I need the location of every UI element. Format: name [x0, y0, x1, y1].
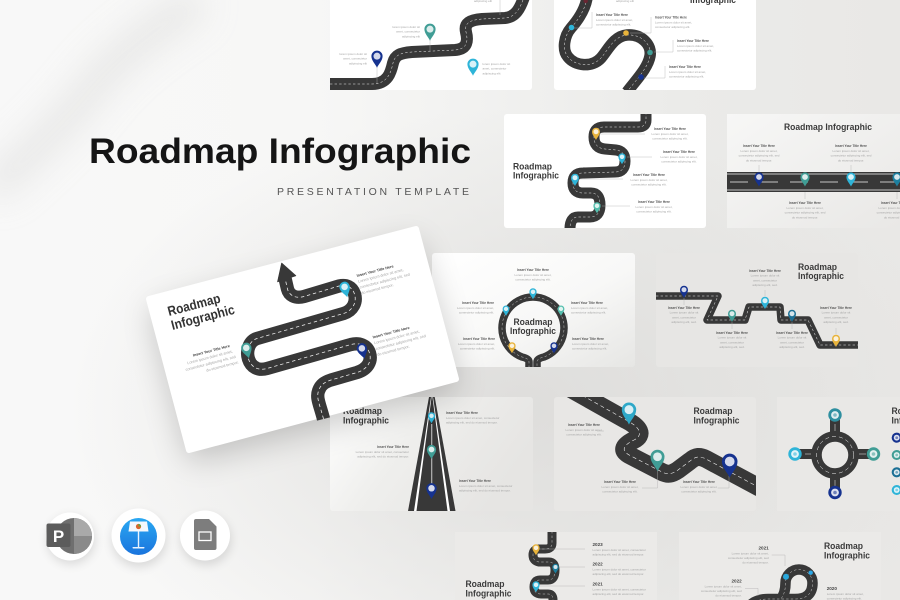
heading: Roadmap [166, 291, 222, 319]
pin: cyan [532, 581, 540, 592]
heading: Roadmap [514, 317, 553, 328]
text: label 1: Lorem ipsum dolor sit amet, [596, 18, 633, 22]
text: 2021: do eiusmod tempor. [742, 561, 769, 565]
panel: straight road slide [727, 114, 900, 228]
text: label 4: Insert Your Title Here [638, 200, 670, 204]
pin: yellow [832, 335, 840, 347]
text: top label: Lorem ipsum dolor sit amet, consectetur [446, 416, 499, 420]
text: label 2: Lorem ipsum dolor sit [718, 336, 746, 340]
text: 2020: 2020 [827, 586, 837, 591]
pin: teal [427, 445, 436, 459]
heading: Infographic [798, 271, 844, 282]
text: label 2: Lorem ipsum dolor sit amet, [660, 155, 698, 159]
road [330, 0, 525, 84]
panel: timeline road slide right [701, 541, 870, 600]
pin: navy [754, 172, 764, 187]
text: top label: Lorem ipsum dolor sit amet, [514, 273, 552, 277]
text: middle label: Lorem ipsum dolor sit amet, [601, 485, 639, 489]
main card shadow [150, 240, 460, 462]
text: middle label: consectetur adipiscing elit. [602, 490, 638, 494]
text: top label: Insert Your Title Here [446, 411, 478, 415]
road [502, 297, 564, 368]
text: middle label: Insert Your Title Here [377, 445, 409, 449]
icon: powerpoint: P [53, 527, 64, 546]
heading: Roadmap [466, 579, 505, 590]
text: right upper label: do eiusmod tempor. [361, 283, 394, 295]
heading: Infographic [343, 416, 389, 426]
pin: cyan [467, 59, 479, 76]
text: label 5: Insert Your Title Here [820, 306, 852, 310]
text: cyan label: adipiscing elit [482, 71, 501, 75]
text: right lower label: Lorem ipsum dolor sit amet, [374, 330, 420, 345]
panel: stepped road slide [656, 262, 858, 349]
text: 2022: consectetur adipiscing elit, sed [701, 589, 742, 593]
pin: navy [426, 483, 437, 499]
text: label 3: Insert Your Title Here [749, 269, 781, 273]
pin: navy [680, 286, 688, 298]
heading: Infographic [513, 170, 559, 182]
panel: top left road slide [330, 0, 532, 90]
text: left label: Lorem ipsum dolor sit amet, [565, 428, 603, 432]
panel: circular road slide [432, 253, 635, 367]
pin: dark teal [892, 172, 900, 187]
text: label 3: consectetur adipiscing elit, sed [785, 211, 826, 215]
text: right lower label [372, 322, 428, 357]
text: left lower label: Insert Your Title Here [463, 337, 495, 341]
pin: yellow [623, 30, 629, 36]
text: left lower label: Lorem ipsum dolor sit amet, [458, 342, 495, 346]
panel: top middle road slide [554, 0, 756, 90]
pin: cyan left [503, 305, 509, 316]
heading: Roadmap [798, 262, 837, 273]
heading [343, 406, 389, 426]
text: left label: consectetur adipiscing elit, sed [185, 355, 236, 372]
pin: cyan note [622, 402, 636, 425]
text: label 4: consectetur adipiscing elit. [669, 75, 704, 79]
pin: cyan [569, 25, 574, 30]
pin: left [788, 447, 802, 461]
text: label 1: consectetur adipiscing elit. [652, 137, 688, 141]
heading: Roadmap [824, 541, 863, 552]
text: 2022: do eiusmod tempor. [715, 594, 742, 598]
text: cyan label: lorem ipsum dolor sit [482, 62, 510, 66]
text: bottom label: Insert Your Title Here [459, 479, 491, 483]
text: label 2: Insert Your Title Here [835, 144, 867, 148]
text: label 2: consectetur adipiscing elit. [655, 25, 690, 29]
text: label 3: amet, consectetur [753, 278, 777, 282]
text: label 2: consectetur adipiscing elit. [661, 160, 697, 164]
pin: teal [240, 342, 254, 360]
text: 2021: 2021 [758, 546, 769, 550]
pin: teal [728, 310, 736, 322]
text: label 5: amet, consectetur [824, 315, 848, 319]
pin: yellow [592, 128, 600, 140]
text: label 3: consectetur adipiscing elit. [677, 49, 712, 53]
text: label 5: Lorem ipsum dolor sit [822, 311, 850, 315]
pin: cyan top [529, 288, 537, 299]
text: 2023: Lorem ipsum dolor sit amet, consectetur [592, 548, 646, 552]
road [533, 531, 555, 600]
text: left label: Insert Your Title Here [568, 423, 600, 427]
text: label 2: amet, consectetur [720, 340, 744, 344]
pin: teal bus [650, 450, 664, 471]
panel: timeline road slide left [466, 532, 646, 600]
heading [798, 262, 844, 282]
text: bottom label: Lorem ipsum dolor sit amet, consectetur [459, 484, 512, 488]
text: right lower label: consectetur adipiscing elit, sed [375, 334, 426, 351]
pin: navy [638, 74, 644, 80]
text: left upper label: consectetur adipiscing elit. [459, 311, 494, 315]
pin: navy [550, 342, 558, 353]
text: label 1: consectetur adipiscing elit. [596, 23, 631, 27]
pin: dark teal [552, 564, 559, 574]
text: 2021: 2021 [592, 582, 603, 586]
panel: roundabout slide [788, 406, 900, 500]
text: 2023: 2023 [592, 542, 603, 547]
text: 2022: Lorem ipsum dolor sit amet, [705, 584, 742, 588]
text: right upper label [356, 261, 412, 295]
text: right upper label: consectetur adipiscing elit. [571, 311, 606, 315]
text: 2021: Lorem ipsum dolor sit amet, consectetur [592, 588, 646, 592]
road [570, 388, 760, 488]
text: left label: do eiusmod tempor. [206, 360, 239, 373]
text: left label: Lorem ipsum dolor sit amet, [187, 350, 233, 365]
text: right lower label: do eiusmod tempor. [377, 345, 410, 357]
pin: cyan [338, 281, 352, 299]
text: navy label: lorem ipsum dolor sit [339, 52, 367, 56]
heading: Infographic [510, 326, 556, 337]
pin: bottom [828, 486, 842, 499]
text: 2022: adipiscing elit, sed do eiusmod tempor. [592, 572, 644, 576]
icon: powerpoint [46, 512, 95, 564]
text: navy label: adipiscing elit [349, 61, 367, 65]
text: 2022: 2022 [592, 562, 603, 566]
text: label 1: consectetur adipiscing elit, sed [739, 154, 780, 158]
heading [824, 541, 870, 562]
text: label 4: consectetur adipiscing elit. [636, 210, 672, 214]
text: top label: consectetur adipiscing elit. [515, 278, 551, 282]
text: 2021: adipiscing elit, sed do eiusmod tempor. [592, 592, 644, 596]
pin: dark red [584, 0, 588, 3]
text: right label: Insert Your Title Here [683, 480, 715, 484]
text: label 2: do eiusmod tempor. [838, 158, 864, 162]
text: top label: adipiscing elit, sed do eiusmod tempor. [446, 421, 498, 425]
text: label 1: Lorem ipsum dolor sit [670, 311, 698, 315]
text: label 3: Lorem ipsum dolor sit amet, [677, 44, 714, 48]
text: cyan label: amet, consectetur [482, 67, 506, 71]
text: label 1: Lorem ipsum dolor sit amet, [651, 132, 689, 136]
pin: right [867, 447, 880, 461]
heading: Roadmap [694, 406, 733, 417]
text: label 4: Insert Your Title Here [669, 65, 701, 69]
text: middle label: adipiscing elit, sed do eiusmod tempor. [357, 455, 409, 459]
heading: Infographic [466, 588, 512, 600]
text: label 1: do eiusmod tempor. [746, 158, 772, 162]
text: label 4: adipiscing elit, sed. [779, 345, 805, 349]
text: left label: consectetur adipiscing elit. [566, 433, 602, 437]
text: left upper label: Insert Your Title Here [462, 301, 494, 305]
text: label 2: Insert Your Title Here [663, 150, 695, 154]
road [727, 172, 900, 192]
text: navy label: amet, consectetur [343, 57, 367, 61]
pin: cyan [618, 153, 626, 164]
text: right lower label: Insert Your Title Here [372, 326, 410, 339]
text: 2022: Lorem ipsum dolor sit amet, consectetur [592, 568, 646, 572]
panel: winding road slide [504, 114, 706, 228]
pin: cyan 2 [571, 174, 579, 186]
panel: main tilted slide [149, 229, 456, 450]
road with arrow [248, 263, 370, 419]
text: label 1: Insert Your Title Here [668, 306, 700, 310]
road [795, 415, 873, 492]
road [570, 112, 646, 229]
text: label 3: Insert Your Title Here [677, 39, 709, 43]
text: label 3: Insert Your Title Here [789, 201, 821, 205]
pin: cyan [846, 172, 856, 187]
pin: top [828, 408, 842, 422]
heading [513, 162, 559, 182]
text: label 2: Lorem ipsum dolor sit amet, [655, 20, 692, 24]
text: right label: consectetur adipiscing elit. [681, 490, 717, 494]
text: middle label: Insert Your Title Here [604, 480, 636, 484]
heading: Roadmap [513, 162, 552, 172]
pin: navy car [722, 454, 738, 478]
heading: Infographic [169, 302, 237, 333]
pin: navy [371, 51, 383, 68]
text: 2020: Lorem ipsum dolor sit amet, [827, 592, 864, 596]
text: label 1: Insert Your Title Here [654, 127, 686, 131]
text: label 2: consectetur adipiscing elit, sed [831, 154, 872, 158]
text: middle label: Lorem ipsum dolor sit amet, consectetur [356, 450, 409, 454]
text: label 3: Lorem ipsum dolor sit amet, [630, 178, 668, 182]
pin: cyan right [808, 570, 813, 575]
pin: teal right [558, 305, 564, 316]
heading: Roadmap [343, 406, 382, 417]
heading: Infographic [694, 416, 740, 426]
slide thumbnails [330, 0, 900, 600]
text: right upper label: Insert Your Title Here [356, 264, 394, 278]
text: label 5: adipiscing elit, sed. [823, 320, 849, 324]
arrow head [278, 263, 296, 282]
text: label 2: Lorem ipsum dolor sit amet, [832, 149, 870, 153]
text: label 4: Insert Your Title Here [776, 331, 808, 335]
heading [510, 317, 556, 337]
pin: navy [356, 342, 370, 360]
text: left lower label: consectetur adipiscing elit. [460, 347, 495, 351]
text: top label: Insert Your Title Here [517, 268, 549, 272]
panel: perspective road slide [330, 397, 533, 511]
text: teal label: amet, consectetur [396, 30, 420, 34]
text: 2022: 2022 [731, 578, 742, 584]
pin: cyan [761, 297, 769, 309]
text: label 1: Lorem ipsum dolor sit amet, [740, 149, 778, 153]
text: right lower label: consectetur adipiscing elit. [572, 347, 607, 351]
pin: yellow [532, 544, 540, 555]
subtitle: PRESENTATION TEMPLATE [277, 186, 469, 198]
heading [892, 406, 900, 426]
text: right upper label: Lorem ipsum dolor sit amet, [358, 268, 404, 284]
text: 2023: adipiscing elit, sed do eiusmod tempor. [592, 553, 644, 557]
pin: dark teal [788, 310, 796, 322]
text: left upper label: Lorem ipsum dolor sit amet, [457, 306, 494, 310]
pin: teal [593, 202, 601, 213]
text: label 1: amet, consectetur [672, 315, 696, 319]
heading [694, 406, 740, 426]
text: left label: Insert Your Title Here [192, 344, 230, 358]
text: label 4: Lorem ipsum dolor sit amet, [669, 70, 706, 74]
text: label 1: Insert Your Title Here [596, 13, 628, 17]
title: Roadmap Infographic [89, 132, 471, 171]
text: right label: Lorem ipsum dolor sit amet, [680, 485, 718, 489]
heading [166, 291, 237, 333]
text: right lower label: Insert Your Title Here [572, 337, 604, 341]
text: label 4: Lorem ipsum dolor sit [778, 336, 806, 340]
text: label 3: Lorem ipsum dolor sit [751, 274, 780, 278]
pin: teal [647, 50, 653, 55]
panel: wide diagonal road slide [554, 397, 756, 496]
text: right upper label: Lorem ipsum dolor sit amet, [571, 306, 608, 310]
icon: google slides [180, 510, 231, 565]
text: label 3: adipiscing elit, sed. [752, 283, 778, 287]
text: left label [182, 343, 239, 378]
text: label 2: Insert Your Title Here [716, 331, 748, 335]
text: right upper label: consectetur adipiscing elit, sed [359, 273, 410, 290]
text: label 2: adipiscing elit, sed. [719, 345, 745, 349]
text: 2021: consectetur adipiscing elit, sed [728, 556, 769, 560]
road [745, 570, 812, 600]
icon list [892, 433, 900, 495]
pin: teal [424, 24, 436, 41]
heading: Roadmap Infographic [784, 122, 872, 133]
text: label 2: Insert Your Title Here [655, 16, 687, 20]
icon: keynote [112, 508, 166, 567]
heading [466, 579, 512, 600]
text: label 3: Lorem ipsum dolor sit amet, [786, 206, 824, 210]
text: label 3: Insert Your Title Here [633, 173, 665, 177]
road [408, 397, 456, 511]
text: teal label: adipiscing elit [402, 34, 420, 38]
text: teal label: lorem ipsum dolor sit [392, 25, 420, 29]
pin: yellow [508, 342, 516, 353]
text: bottom label: adipiscing elit, sed do eiusmod tempor. [459, 489, 511, 493]
road [564, 0, 650, 92]
text: label 3: consectetur adipiscing elit. [631, 183, 667, 187]
text: label 4: Lorem ipsum dolor sit amet, [635, 205, 673, 209]
text: label 4: amet, consectetur [780, 340, 804, 344]
text: right upper label: Insert Your Title Here [571, 301, 603, 305]
text: label 1: Insert Your Title Here [743, 144, 775, 148]
text: 2021: Lorem ipsum dolor sit amet, [732, 552, 769, 556]
pin: teal [800, 172, 810, 187]
text: label 1: adipiscing elit, sed. [671, 320, 697, 324]
text: label 3: do eiusmod tempor. [792, 215, 818, 219]
text: right lower label: Lorem ipsum dolor sit amet, [572, 342, 609, 346]
pin: cyan [428, 412, 435, 423]
road [656, 296, 858, 345]
heading: Infographic [824, 550, 870, 562]
pin: cyan left [783, 574, 789, 580]
